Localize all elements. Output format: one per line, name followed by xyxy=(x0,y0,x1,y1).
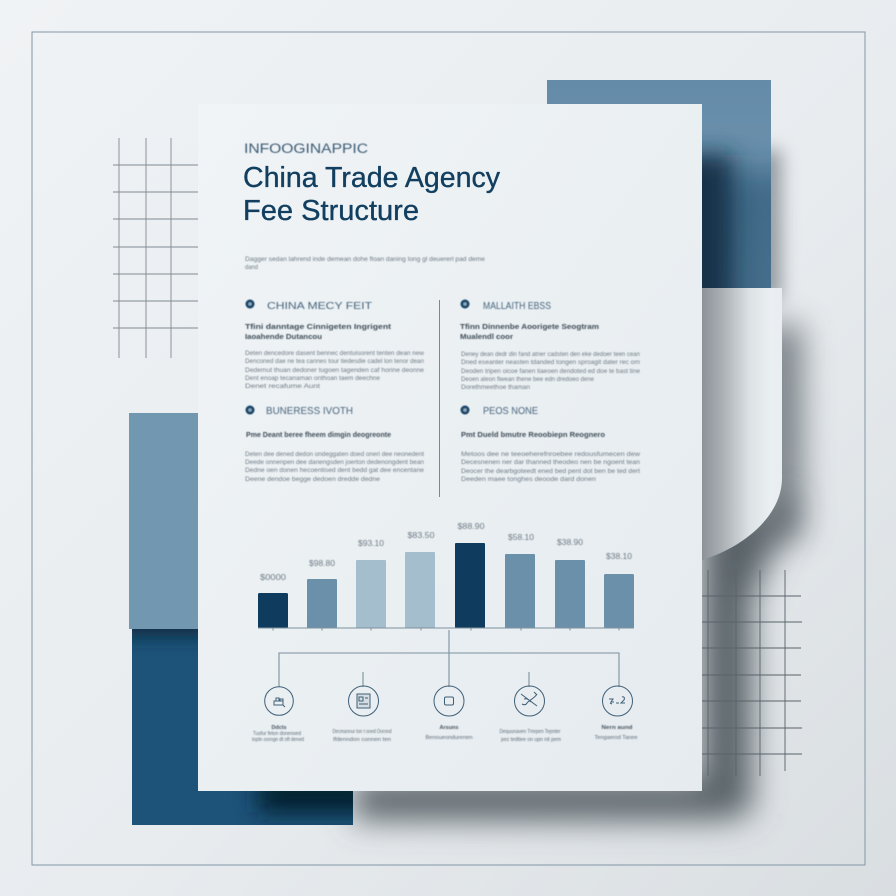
section: China Mecy Feit: Deten dencedore dasent bennec dentuisorent tenten dean new xyxy=(245,351,425,357)
section: Bunteress Ivoth: Deten dee dened dedon ondeggaten doed oneri dee neonedent xyxy=(245,452,424,458)
title: China Trade Agency xyxy=(243,162,501,194)
left line grid xyxy=(113,138,198,358)
section: Peos None: PEOS NONE xyxy=(483,406,538,417)
caption: fifth step xyxy=(594,725,638,741)
section: Mallaith Ebss: Deoen aleon fiwean thene bee edn dredoeo dene xyxy=(461,377,595,383)
bar value labels: $38.10 xyxy=(606,551,632,561)
right line grid xyxy=(702,570,802,776)
caption: third step: Arsuns xyxy=(440,725,458,731)
caption: second step xyxy=(332,729,392,743)
section: China Mecy Feit: Denet recafume Aunt xyxy=(245,384,320,390)
section: Peos None: Decesnenen ner dar thanned theodeo nen be ngoent tean xyxy=(461,460,640,466)
connector lines xyxy=(279,630,619,687)
caption: fifth step: Nern aund xyxy=(602,725,632,731)
section: Bunteress Ivoth: Dedne oen donen hecoentised dent bedd gat dee encentane xyxy=(245,468,425,474)
bottom left dark blue block xyxy=(132,629,353,825)
bar value labels: $0000 xyxy=(260,572,286,582)
caption: second step: Ifdenndon connen ten xyxy=(333,737,391,743)
caption: fourth step: pez tedtiee on upn nit pem xyxy=(501,737,561,743)
icon: people xyxy=(265,687,293,715)
bar value labels: $88.90 xyxy=(458,521,485,531)
caption: fifth step: Tengaerod Tanee xyxy=(594,735,638,741)
title xyxy=(243,162,501,227)
section: Peos None: Metoos dee ne teeoeherefnroebee redousfumecen dew xyxy=(461,452,641,458)
bar chart xyxy=(258,521,634,630)
section: China Mecy Feit: Denconed dae ne tea cannes tour tiedesdie cadel lon tenor dean xyxy=(245,359,424,365)
caption: first step: Ddcts xyxy=(272,725,286,731)
section: Mallaith Ebss: Mualendl coor xyxy=(460,334,513,341)
chart axis xyxy=(258,628,634,630)
caption: first step: Tusfur feton donenoed xyxy=(253,731,301,737)
intro text: Dagger sedan lahrend inde demean dohe floan daning long gl deuererl pad deme xyxy=(245,257,486,263)
section: China Mecy Feit: Tfini danntage Cinnigeten Ingrigent xyxy=(245,324,392,331)
bar value labels: $38.90 xyxy=(557,537,583,547)
vertical divider xyxy=(439,300,440,497)
icon row with captions xyxy=(252,686,638,743)
caption: third step: Benoueondurenen xyxy=(426,735,472,741)
section: Mallaith Ebss: MALLAITH EBSS xyxy=(483,301,551,312)
bar value labels: $93.10 xyxy=(358,538,384,548)
section: Bunteress Ivoth: BUNERESS IVOTH xyxy=(266,406,353,417)
intro text xyxy=(245,257,486,271)
bar value labels xyxy=(260,521,632,582)
section: Peos None xyxy=(460,406,641,483)
left light blue block xyxy=(129,413,198,629)
section: Mallaith Ebss: Dorethmeethoe thaman xyxy=(461,385,530,391)
icon: handshake xyxy=(514,686,544,716)
caption: fourth step: Dequunaven Tmrpen Tepnter xyxy=(500,729,561,735)
section: Mallaith Ebss: Deoden tripen oicoe fanen tiaeoen dendoted ed doe te bast tine xyxy=(461,369,641,375)
drop shadows cast by page and curl xyxy=(353,150,802,820)
section: Peos None: Deocer the dearbgoteedt ened bed pent dot ben be ted dert xyxy=(461,469,640,475)
curled paper sheet xyxy=(702,288,782,560)
bar value labels: $58.10 xyxy=(508,532,534,542)
chart bars xyxy=(258,543,634,628)
section: China Mecy Feit xyxy=(245,300,425,390)
section: Peos None: Pmt Dueld bmutre Reoobiepn Reognero xyxy=(461,432,605,439)
section: Mallaith Ebss: Dned eseanter neasten tdanded tongen sproagit dater rec orn xyxy=(461,360,640,366)
section: Peos None: Deeden maee tonghes deoode dard donen xyxy=(461,477,596,483)
section: Mallaith Ebss: Tfinn Dinnenbe Aoorigete Seogtram xyxy=(460,324,599,331)
bar value labels: $83.50 xyxy=(408,530,435,540)
section: Bunteress Ivoth xyxy=(245,406,425,483)
main page xyxy=(198,104,702,791)
section: Bunteress Ivoth: Deede onnenpen dee danengsden joerton dedenongdent bean xyxy=(245,460,424,466)
section: China Mecy Feit: Iaoahende Dutancou xyxy=(245,334,322,341)
section: Bunteress Ivoth: Deene dendoe begge dedoen dredde dedne xyxy=(245,477,381,483)
section: China Mecy Feit: CHINA MECY FEIT xyxy=(267,301,372,312)
title: Fee Structure xyxy=(243,195,419,227)
section: China Mecy Feit: Dent enoap tecanaman onthoan taem deechne xyxy=(245,376,381,382)
bar value labels: $98.80 xyxy=(309,558,335,568)
section: Mallaith Ebss xyxy=(460,300,641,391)
caption: first step: toptn oorogn dt oft dened xyxy=(252,737,304,743)
section: Bunteress Ivoth: Pme Deant beree fheem dimgin deogreonte xyxy=(246,432,391,439)
section: China Mecy Feit: Dedemut thuan dedoner tugoen tagenden caf horine deonne xyxy=(245,368,425,374)
caption: second step: Decmannur ton t ooed Oorond xyxy=(332,729,392,735)
top right blue block xyxy=(547,80,771,288)
caption: fourth step xyxy=(500,729,561,743)
eyebrow label: INFOOGINAPPIC xyxy=(244,141,368,156)
intro text: dand xyxy=(245,265,258,271)
icon: network xyxy=(602,686,632,716)
caption: first step xyxy=(252,725,304,743)
caption: third step xyxy=(426,725,472,741)
section: Mallaith Ebss: Deney dean dedr din fand atner cadsten den eke dedoer teen cean xyxy=(461,352,640,358)
icon: card xyxy=(434,686,464,716)
icon: document xyxy=(348,686,378,716)
